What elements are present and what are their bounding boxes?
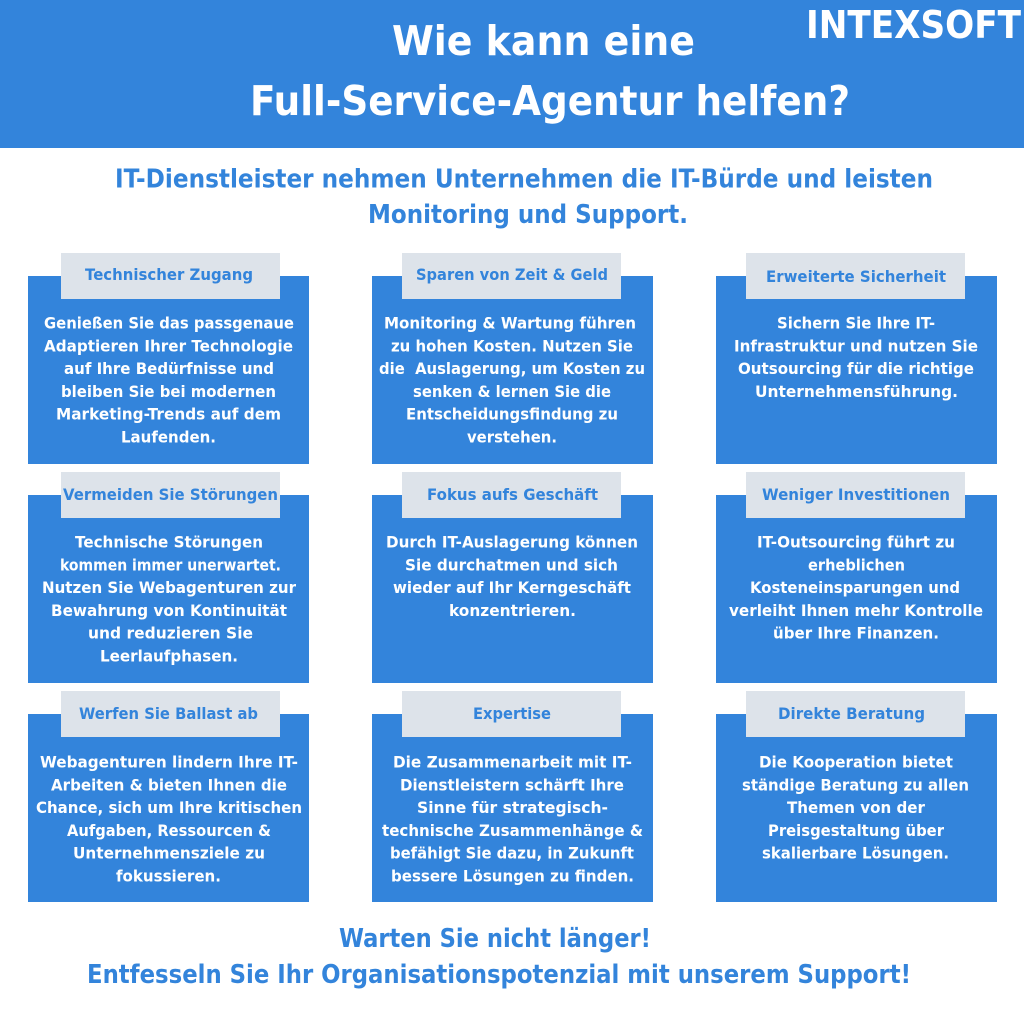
text: Fokus aufs Geschäft body: [386, 532, 638, 620]
text: Vermeiden Sie Störungen body: kommen immer unerwartet.: [60, 555, 281, 574]
text: Technischer Zugang body: Adaptieren Ihrer Technologie: [44, 336, 293, 355]
text: Erweiterte Sicherheit body: Outsourcing für die richtige: [738, 359, 974, 378]
text: Direkte Beratung body: [742, 752, 969, 863]
text: Fokus aufs Geschäft body: wieder auf Ihr Kerngeschäft: [393, 578, 631, 597]
panel: Werfen Sie Ballast ab: [28, 691, 309, 902]
text: Vermeiden Sie Störungen body: Leerlaufphasen.: [100, 646, 238, 666]
panel: Technischer Zugang: [28, 253, 309, 464]
panel: Sparen von Zeit & Geld: [372, 253, 653, 464]
text: Sparen von Zeit & Geld body: senken & lernen Sie die: [413, 382, 611, 401]
subtitle: Monitoring und Support.: [368, 200, 688, 230]
text: Fokus aufs Geschäft body: Durch IT-Auslagerung können: [386, 532, 638, 552]
text: Sparen von Zeit & Geld body: [379, 314, 645, 446]
text: Erweiterte Sicherheit body: Infrastruktur und nutzen Sie: [734, 336, 978, 355]
footer call to action: Warten Sie nicht länger!: [339, 924, 651, 954]
footer call to action: Entfesseln Sie Ihr Organisationspotenzial mit unserem Support!: [87, 960, 911, 990]
text: Sparen von Zeit & Geld body: zu hohen Kosten. Nutzen Sie: [391, 336, 633, 355]
panel: Vermeiden Sie Störungen: Vermeiden Sie Störungen: [63, 485, 278, 504]
subtitle: [115, 164, 933, 230]
text: Vermeiden Sie Störungen body: [42, 532, 296, 666]
text: Expertise body: technische Zusammenhänge &: [382, 821, 643, 840]
text: Expertise body: [382, 752, 643, 886]
text: Erweiterte Sicherheit body: Unternehmensführung.: [755, 382, 958, 401]
text: Vermeiden Sie Störungen body: und reduzieren Sie: [88, 624, 253, 643]
text: Erweiterte Sicherheit body: Sichern Sie Ihre IT-: [777, 314, 935, 332]
text: Expertise body: bessere Lösungen zu finden.: [391, 866, 634, 886]
text: Weniger Investitionen body: über Ihre Finanzen.: [773, 624, 939, 643]
text: Direkte Beratung body: ständige Beratung zu allen: [742, 775, 969, 794]
text: Vermeiden Sie Störungen body: Technische Störungen: [75, 532, 263, 552]
text: Technischer Zugang body: Genießen Sie das passgenaue: [44, 314, 294, 332]
text: Werfen Sie Ballast ab body: Webagenturen lindern Ihre IT-: [40, 752, 298, 772]
header band: [0, 0, 1024, 148]
text: Werfen Sie Ballast ab body: Chance, sich um Ihre kritischen: [36, 798, 302, 817]
text: Werfen Sie Ballast ab body: Aufgaben, Ressourcen &: [67, 821, 271, 840]
text: Werfen Sie Ballast ab body: [36, 752, 302, 886]
text: Expertise body: Dienstleistern schärft Ihre: [400, 775, 624, 794]
text: Sparen von Zeit & Geld body: Monitoring & Wartung führen: [384, 314, 636, 332]
panel: Expertise: Expertise: [473, 704, 551, 723]
text: Technischer Zugang body: Laufenden.: [121, 428, 216, 446]
text: Werfen Sie Ballast ab body: Unternehmensziele zu: [73, 844, 265, 863]
text: Technischer Zugang body: [44, 314, 294, 446]
panel: Direkte Beratung: [716, 691, 997, 902]
text: Technischer Zugang body: auf Ihre Bedürfnisse und: [64, 359, 274, 378]
panel: Technischer Zugang: Technischer Zugang: [85, 265, 253, 284]
text: Direkte Beratung body: skalierbare Lösungen.: [762, 844, 949, 863]
text: Erweiterte Sicherheit body: [734, 314, 978, 401]
text: Werfen Sie Ballast ab body: Arbeiten & bieten Ihnen die: [51, 775, 287, 794]
text: Expertise body: Sinne für strategisch-: [417, 798, 608, 817]
text: Direkte Beratung body: Die Kooperation bietet: [759, 752, 953, 772]
panel: Fokus aufs Geschäft: Fokus aufs Geschäft: [427, 485, 598, 504]
subtitle: IT-Dienstleister nehmen Unternehmen die IT-Bürde und leisten: [115, 164, 933, 194]
text: Vermeiden Sie Störungen body: Nutzen Sie Webagenturen zur: [42, 578, 296, 597]
panel: Weniger Investitionen: Weniger Investitionen: [762, 485, 950, 504]
text: Technischer Zugang body: Marketing-Trends auf dem: [56, 405, 281, 424]
text: Weniger Investitionen body: IT-Outsourcing führt zu: [757, 532, 955, 552]
panel: Sparen von Zeit & Geld: Sparen von Zeit & Geld: [416, 265, 608, 284]
text: Direkte Beratung body: Preisgestaltung über: [768, 821, 944, 840]
title: Full-Service-Agentur helfen?: [250, 77, 850, 125]
panel: Expertise: [372, 691, 653, 902]
text: Sparen von Zeit & Geld body: Entscheidungsfindung zu: [406, 405, 618, 424]
text: Technischer Zugang body: bleiben Sie bei modernen: [61, 382, 276, 401]
text: Weniger Investitionen body: Kosteneinsparungen und: [750, 578, 960, 597]
text: Direkte Beratung body: Themen von der: [787, 798, 925, 817]
panel: Vermeiden Sie Störungen: [28, 472, 309, 683]
text: Expertise body: Die Zusammenarbeit mit IT-: [393, 752, 632, 772]
text: Weniger Investitionen body: verleiht Ihnen mehr Kontrolle: [729, 601, 983, 620]
panel: Erweiterte Sicherheit: Erweiterte Sicherheit: [766, 267, 946, 286]
panel: Direkte Beratung: Direkte Beratung: [778, 704, 925, 723]
text: Fokus aufs Geschäft body: konzentrieren.: [449, 601, 576, 620]
panel: Erweiterte Sicherheit: [716, 253, 997, 464]
text: Fokus aufs Geschäft body: Sie durchatmen und sich: [405, 555, 618, 574]
panel: Fokus aufs Geschäft: [372, 472, 653, 683]
footer call to action: [87, 924, 911, 990]
title: [250, 17, 850, 125]
text: Weniger Investitionen body: [729, 532, 983, 643]
text: Expertise body: befähigt Sie dazu, in Zukunft: [390, 844, 634, 863]
text: Werfen Sie Ballast ab body: fokussieren.: [116, 866, 221, 886]
text: Weniger Investitionen body: erheblichen: [808, 555, 905, 574]
text: Sparen von Zeit & Geld body: die Auslagerung, um Kosten zu: [379, 359, 645, 378]
panel: Werfen Sie Ballast ab: Werfen Sie Ballast ab: [79, 704, 258, 723]
text: Sparen von Zeit & Geld body: verstehen.: [467, 428, 557, 446]
title: Wie kann eine: [392, 17, 695, 65]
panel: Weniger Investitionen: [716, 472, 997, 683]
text: Vermeiden Sie Störungen body: Bewahrung von Kontinuität: [51, 601, 287, 620]
